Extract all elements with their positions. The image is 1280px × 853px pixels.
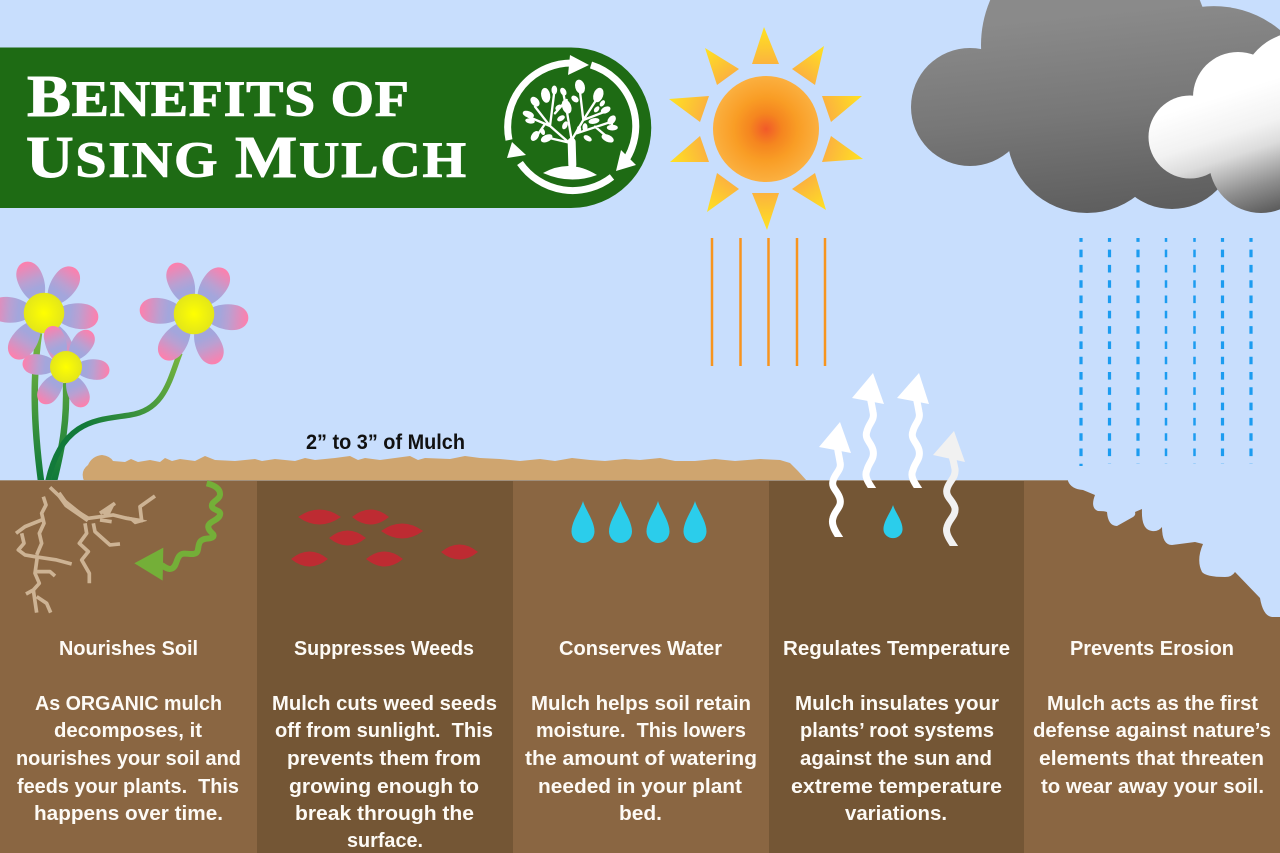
heading: conserves water: Conserves Water xyxy=(559,638,722,660)
rain lines xyxy=(1081,238,1251,466)
text: prevents erosion body: defense against nature’s xyxy=(1033,720,1271,742)
heading: suppresses weeds: Suppresses Weeds xyxy=(294,638,474,660)
text: regulates temperature body: plants’ root systems xyxy=(800,720,994,742)
heading: nourishes soil: Nourishes Soil xyxy=(59,638,198,660)
title banner xyxy=(0,48,651,208)
text: suppresses weeds body: Mulch cuts weed seeds xyxy=(272,693,497,715)
text: suppresses weeds body: off from sunlight. This xyxy=(275,720,493,742)
icon: green nutrient arrow xyxy=(134,483,220,581)
arrow: heat rising 3 xyxy=(897,373,929,494)
icon: water drop small xyxy=(883,505,903,538)
text: nourishes soil body: decomposes, it xyxy=(54,720,202,742)
text: conserves water body: the amount of watering xyxy=(525,748,757,770)
sun rays lines xyxy=(712,238,825,366)
heading: regulates temperature: Regulates Temperature xyxy=(783,638,1010,660)
text: conserves water body: moisture. This lowers xyxy=(536,720,746,742)
icon: sun xyxy=(669,27,863,230)
text: conserves water body: Mulch helps soil retain xyxy=(531,693,751,715)
text: prevents erosion body: Mulch acts as the first xyxy=(1047,693,1258,715)
flower stems xyxy=(35,333,180,481)
panel: conserves water xyxy=(513,481,769,853)
icon: recycling circle with tree xyxy=(507,55,636,191)
icon: water drops xyxy=(572,501,706,543)
text: regulates temperature body: Mulch insulates your xyxy=(795,693,999,715)
arrow: heat rising 4 xyxy=(933,431,965,552)
text: suppresses weeds body: surface. xyxy=(347,830,423,852)
text: prevents erosion body: elements that threaten xyxy=(1039,748,1264,770)
text: suppresses weeds body: break through the xyxy=(295,803,474,825)
icon: flower left xyxy=(0,258,99,368)
text: regulates temperature body xyxy=(791,693,1002,825)
text: regulates temperature body: variations. xyxy=(845,803,947,825)
text: nourishes soil body: happens over time. xyxy=(34,803,223,825)
text: suppresses weeds body: growing enough to xyxy=(289,776,479,798)
icon: white cloud xyxy=(1148,32,1280,213)
title xyxy=(26,63,466,190)
text: prevents erosion body xyxy=(1033,693,1271,798)
text: nourishes soil body xyxy=(16,693,241,825)
text: regulates temperature body: against the sun and xyxy=(800,748,992,770)
icon: dark rain cloud xyxy=(911,0,1280,213)
arrow: heat rising 2 xyxy=(852,373,884,494)
text: conserves water body: needed in your plant xyxy=(538,776,742,798)
panel: suppresses weeds xyxy=(257,481,513,853)
panel: regulates temperature xyxy=(769,373,1024,853)
text: nourishes soil body: nourishes your soil and xyxy=(16,748,241,770)
mulch layer xyxy=(83,455,807,481)
mulch depth label: 2” to 3” of Mulch xyxy=(306,431,465,454)
text: prevents erosion body: to wear away your soil. xyxy=(1041,776,1264,798)
icon: flower small xyxy=(22,323,110,411)
heading: prevents erosion: Prevents Erosion xyxy=(1070,638,1234,660)
text: conserves water body: bed. xyxy=(619,803,662,825)
text: conserves water body xyxy=(525,693,757,825)
icon: roots xyxy=(16,487,155,613)
arrow: heat rising 1 xyxy=(819,422,851,543)
icon: weed seeds xyxy=(291,510,478,566)
text: suppresses weeds body: prevents them from xyxy=(287,748,481,770)
icon: flower right xyxy=(139,259,249,369)
text: nourishes soil body: As ORGANIC mulch xyxy=(35,693,222,715)
text: suppresses weeds body xyxy=(272,693,497,852)
panel: prevents erosion xyxy=(1024,481,1280,853)
panel: nourishes soil xyxy=(0,481,257,853)
title: USING MULCH xyxy=(26,124,466,190)
text: nourishes soil body: feeds your plants. This xyxy=(17,776,239,798)
title: BENEFITS OF xyxy=(27,63,409,129)
text: regulates temperature body: extreme temperature xyxy=(791,776,1002,798)
